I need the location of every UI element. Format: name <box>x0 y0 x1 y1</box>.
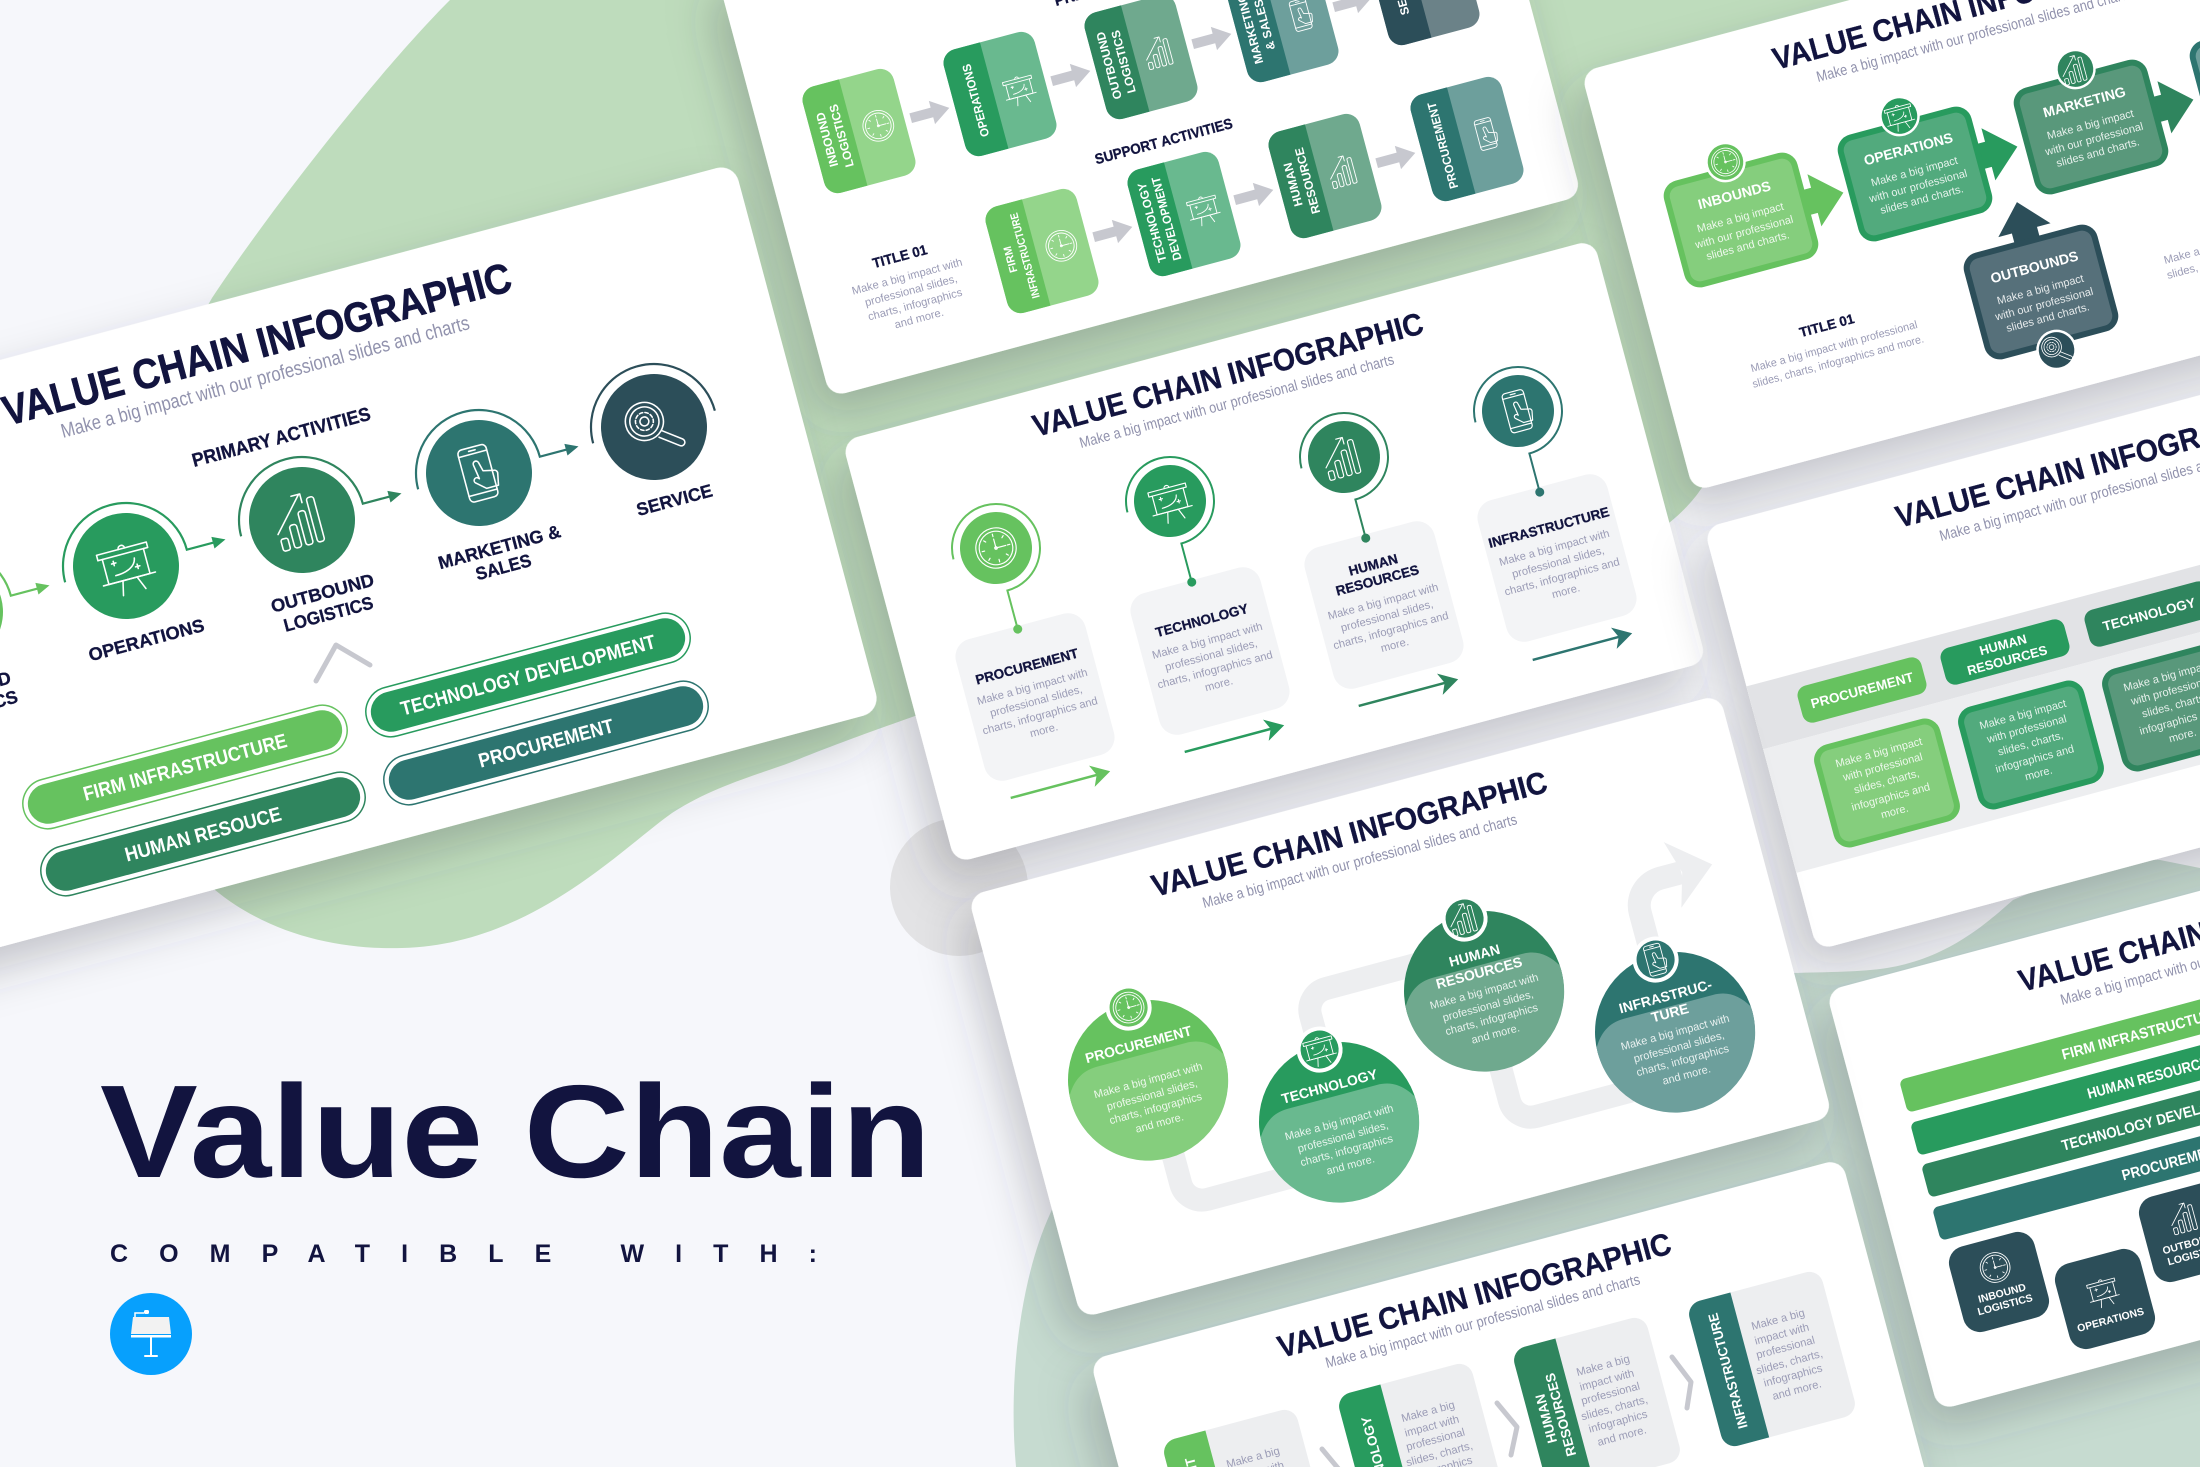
bubble: human resources: RESOURCES <box>1434 953 1524 992</box>
column: human resources: infographics <box>1587 1408 1649 1436</box>
bubble: infrastructure <box>1573 919 1773 1131</box>
background blob: sage <box>1014 860 2200 1467</box>
tab: human resources: HUMAN <box>1978 631 2028 658</box>
tile: technology development <box>1124 149 1244 279</box>
bar: firm infrastructure <box>1899 925 2200 1113</box>
step: human resources: more. <box>1380 636 1410 655</box>
connector path with arrow <box>1128 831 1763 1210</box>
column: infrastructure: and more. <box>1771 1378 1823 1403</box>
column: technology: impact with <box>1403 1414 1461 1440</box>
column: technology: Make a big <box>1400 1399 1456 1425</box>
step: infrastructure: Make a big impact with <box>1498 528 1611 569</box>
text block: title 01: TITLE 01 <box>871 241 929 271</box>
step: infrastructure: more. <box>1551 582 1581 601</box>
tile: operations: OPERATIONS <box>2076 1306 2145 1335</box>
box: outbounds: OUTBOUNDS <box>1989 247 2080 286</box>
tile: firm infrastructure <box>982 186 1102 316</box>
box: next step, cropped <box>2190 13 2200 147</box>
bubble: human resources: and more. <box>1470 1022 1521 1047</box>
box: technology text: more. <box>2168 727 2198 745</box>
box: procurement text <box>1814 719 1960 847</box>
card background <box>968 695 1833 1318</box>
tile: firm infrastructure: INFRASTRUCTURE <box>1008 211 1043 299</box>
compatible with label: COMPATIBLE WITH: <box>110 1240 817 1268</box>
tab: technology: TECHNOLOGY <box>2101 595 2197 634</box>
bubble: infrastructure: and more. <box>1661 1063 1712 1088</box>
title: VALUE CHAIN INFOGRAPHIC <box>1029 306 1427 444</box>
step: technology: charts, infographics and <box>1156 649 1274 691</box>
title: VALUE CHAIN INFOGRAPHIC <box>1148 764 1551 904</box>
step: technology <box>1116 447 1294 763</box>
tile: outbound logistics: LOGISTICS <box>1108 29 1139 95</box>
tile: operations: OPERATIONS <box>959 62 992 139</box>
step: infrastructure: charts, infographics and <box>1503 556 1621 598</box>
column: human resources: Make a big <box>1575 1353 1631 1379</box>
column: infrastructure: Make a big <box>1750 1307 1806 1333</box>
box: operations: with our professional <box>1867 168 1969 206</box>
step: technology: professional slides, <box>1164 638 1259 674</box>
bubble: technology <box>1237 1009 1437 1221</box>
card background <box>0 163 881 978</box>
band: contents <box>1763 548 2200 873</box>
tile: procurement <box>1407 74 1527 204</box>
bubble: infrastructure: Make a big impact with <box>1620 1013 1731 1053</box>
tile: technology development: DEVELOPMENT <box>1149 175 1185 262</box>
title: VALUE CHAIN INFOGRAPHIC <box>1274 1226 1675 1365</box>
card background <box>1581 0 2200 491</box>
column: human resources: HUMAN <box>1533 1392 1560 1445</box>
box: outbounds: slides and charts. <box>2005 301 2091 335</box>
box: procurement text: with professional <box>1841 751 1924 784</box>
column: human resources: professional <box>1580 1380 1641 1408</box>
tile: inbound logistics: LOGISTICS <box>1976 1292 2034 1318</box>
slide: tabbed columns <box>1704 327 2200 950</box>
step: procurement: charts, infographics and <box>981 695 1099 737</box>
step: inbound logistics <box>0 524 63 679</box>
tile: firm infrastructure: FIRM <box>1002 245 1020 274</box>
column: infrastructure: infographics <box>1762 1362 1824 1390</box>
slide: vertical tabs with chevrons <box>1090 1159 1954 1467</box>
box: procurement text: infographics and <box>1850 781 1931 814</box>
box: procurement text: Make a big impact <box>1834 736 1924 770</box>
arrow <box>1374 141 1418 175</box>
label: marketing and sales: SALES <box>473 550 534 584</box>
bubble: infrastructure: charts, infographics <box>1635 1043 1731 1079</box>
bubble: procurement: professional slides, <box>1105 1078 1199 1113</box>
column: human resources: impact with <box>1578 1368 1636 1394</box>
bubble: procurement: charts, infographics <box>1108 1091 1204 1127</box>
arrow <box>1331 0 1375 19</box>
label: marketing and sales: MARKETING & <box>436 521 563 573</box>
text block: title 01: Make a big impact with <box>851 257 964 298</box>
box: outbounds: with our professional <box>1993 286 2095 324</box>
tile: outbound logistics <box>1081 0 1201 122</box>
column: infrastructure: INFRASTRUCTURE <box>1705 1311 1751 1430</box>
step: infrastructure: INFRASTRUCTURE <box>1487 504 1611 551</box>
card background <box>1090 1159 1954 1467</box>
bar: procurement <box>1932 1053 2200 1241</box>
pill: procurement <box>378 676 714 810</box>
arrow <box>1232 178 1276 212</box>
label: operations: OPERATIONS <box>86 615 207 665</box>
tile: inbound logistics: LOGISTICS <box>826 103 857 169</box>
tile: inbound logistics <box>799 66 919 196</box>
label: service: SERVICE <box>634 480 715 520</box>
tile: outbound logistics <box>2135 1178 2200 1286</box>
bubble: technology: charts, infographics <box>1299 1133 1395 1169</box>
tile: inbound logistics <box>1945 1228 2053 1336</box>
step: human resources: HUMAN <box>1347 551 1399 579</box>
tile: marketing and sales <box>1222 0 1342 85</box>
box: inbounds <box>1657 116 1857 287</box>
box: inbounds: INBOUNDS <box>1696 177 1772 212</box>
text block: title 01: TITLE 01 <box>1798 311 1856 340</box>
step: human resources <box>1290 403 1468 717</box>
text block: title 01: Make a big impact with professional <box>1750 319 1919 375</box>
step: outbound logistics <box>225 432 415 587</box>
box: operations: slides and charts. <box>1879 183 1965 217</box>
step: infrastructure: professional slides, <box>1511 545 1606 581</box>
column: technology <box>1336 1361 1508 1467</box>
box: marketing: with our professional <box>2043 121 2145 159</box>
slide: primary activities with support pills <box>0 163 881 978</box>
box: operations: Make a big impact <box>1870 155 1959 189</box>
tile: inbound logistics: INBOUND <box>1977 1281 2028 1306</box>
tile: operations <box>2051 1245 2159 1353</box>
bubble: human resources <box>1382 878 1582 1090</box>
bubble: infrastructure: INFRASTRUC- <box>1617 976 1714 1016</box>
tab: human resources: RESOURCES <box>1965 642 2049 678</box>
arrow <box>1190 22 1234 56</box>
box: human resources text: with professional <box>1985 713 2068 746</box>
tab: procurement <box>1795 655 1929 725</box>
tab: technology <box>2082 579 2200 649</box>
tile: human resource <box>1265 111 1385 241</box>
card background <box>717 0 1582 397</box>
step: service <box>577 350 729 494</box>
subtitle: Make a big impact with our professional slides and charts <box>1078 351 1396 452</box>
box: human resources text: infographics and <box>1994 743 2075 776</box>
step: procurement <box>942 494 1119 809</box>
subtitle: Make a big impact with our professional slides and charts <box>59 312 472 443</box>
band: tabs <box>1746 485 2200 749</box>
tile: outbound logistics: OUTBOUND <box>1093 30 1125 101</box>
step: operations <box>49 478 239 633</box>
bubble: technology: professional slides, <box>1296 1120 1390 1155</box>
pill: technology development <box>360 608 696 742</box>
label: outbound logistics: LOGISTICS <box>281 593 375 636</box>
column: infrastructure: slides, charts, <box>1755 1348 1824 1377</box>
slide: bubbles on a path <box>968 695 1833 1318</box>
arrow <box>1091 215 1135 249</box>
step: procurement: PROCUREMENT <box>974 645 1081 688</box>
tab: procurement: PROCUREMENT <box>1809 669 1916 711</box>
column: technology: professional <box>1405 1426 1466 1454</box>
pill: human resouce <box>35 767 371 901</box>
arrow <box>1049 59 1093 93</box>
box: outbounds: Make a big impact <box>1996 273 2085 307</box>
step: procurement: Make a big impact with <box>976 667 1089 708</box>
bar: human resource <box>1910 968 2200 1156</box>
bubble: human resources: Make a big impact with <box>1429 972 1540 1012</box>
slide: split tiles <box>717 0 1582 397</box>
text block: title 01 <box>851 241 964 331</box>
tile: service <box>1363 0 1483 48</box>
box: inbounds: slides and charts. <box>1705 229 1791 263</box>
bubble: human resources: professional slides, <box>1441 989 1535 1024</box>
bubble: technology: Make a big impact with <box>1284 1103 1395 1143</box>
text block: title 01: charts, infographics <box>867 287 964 323</box>
icon: keynote <box>110 1293 192 1375</box>
bubble: technology: TECHNOLOGY <box>1280 1066 1380 1107</box>
step: infrastructure <box>1464 357 1641 671</box>
chevron <box>1497 1403 1517 1455</box>
bubble: human resources: HUMAN <box>1447 941 1502 970</box>
heading: primary activities: PRIMARY ACTIVITIES <box>190 404 373 472</box>
heading: support activities: SUPPORT ACTIVITIES <box>1093 116 1235 168</box>
tile: procurement: PROCUREMENT <box>1424 100 1461 190</box>
label: outbound logistics <box>269 570 376 636</box>
box: inbounds: Make a big impact <box>1696 201 1785 235</box>
box: human resources text <box>1958 681 2104 809</box>
step: procurement: professional slides, <box>989 684 1084 720</box>
bubble: technology: and more. <box>1325 1153 1376 1178</box>
box: procurement text: more. <box>1880 803 1910 821</box>
tab: human resources <box>1938 617 2072 687</box>
chevron <box>1322 1449 1342 1467</box>
box: marketing <box>2007 23 2200 194</box>
tile: inbound logistics: INBOUND <box>813 110 841 168</box>
pill: technology development: TECHNOLOGY DEVELOPMENT <box>398 631 658 721</box>
bubble: infrastructure: professional slides, <box>1632 1030 1726 1065</box>
step: human resources: RESOURCES <box>1334 562 1421 599</box>
subtitle: Make a big impact with our professional slides and charts <box>1324 1271 1642 1372</box>
chevron <box>316 645 370 681</box>
box: human resources text: more. <box>2024 765 2054 783</box>
step: technology: TECHNOLOGY <box>1154 601 1250 640</box>
pill: firm infrastructure: FIRM INFRASTRUCTURE <box>81 730 290 806</box>
pill: firm infrastructure <box>17 700 353 834</box>
box: inbounds: with our professional <box>1693 214 1795 252</box>
step: human resources: professional slides, <box>1340 598 1435 635</box>
box: human resources text: Make a big impact <box>1978 698 2068 732</box>
box: outbounds <box>1953 185 2125 385</box>
step: human resources: Make a big impact with <box>1327 582 1440 623</box>
column: infrastructure: impact with <box>1753 1322 1811 1348</box>
arrow <box>908 96 952 130</box>
slide: bordered boxes with arrows <box>1581 0 2200 491</box>
background blob: green <box>115 0 1900 948</box>
tile: human resource: HUMAN <box>1281 161 1306 208</box>
main title: Value Chain <box>100 1058 931 1205</box>
column: infrastructure: professional <box>1755 1334 1816 1362</box>
tile: operations <box>940 29 1060 159</box>
text block: title 01: slides, charts, infographics and more. <box>1751 333 1925 391</box>
pill: human resouce: HUMAN RESOUCE <box>123 804 284 866</box>
box: marketing: slides and charts. <box>2055 136 2141 170</box>
step: technology: Make a big impact with <box>1151 621 1264 662</box>
step: procurement: more. <box>1029 721 1059 740</box>
step: technology: more. <box>1204 675 1234 694</box>
box: marketing: MARKETING <box>2041 83 2127 121</box>
slide: pinned circles and note cards <box>842 240 1707 863</box>
box: procurement text: slides, charts, <box>1853 768 1921 797</box>
chevron <box>1672 1357 1691 1408</box>
box: operations: OPERATIONS <box>1862 129 1955 168</box>
step: human resources: charts, infographics and <box>1332 610 1450 652</box>
bubble: procurement: PROCUREMENT <box>1083 1022 1194 1066</box>
bubble: procurement: and more. <box>1134 1111 1185 1136</box>
card background <box>1826 790 2200 1410</box>
box: technology text <box>2102 643 2200 771</box>
column: infrastructure <box>1686 1269 1858 1449</box>
bar: technology development <box>1921 1010 2200 1198</box>
column: human resources: and more. <box>1596 1424 1648 1449</box>
column: human resources <box>1511 1315 1683 1467</box>
subtitle: Make a big impact with our professional slides and charts <box>1201 811 1519 912</box>
box: marketing: Make a big impact <box>2046 108 2135 142</box>
bubble: infrastructure: TURE <box>1649 1000 1690 1025</box>
box: operations <box>1831 70 2031 241</box>
tile: technology development: TECHNOLOGY <box>1135 181 1169 264</box>
card background <box>1704 327 2200 950</box>
title: VALUE CHAIN INFOGRAPHIC <box>0 253 516 435</box>
column: procurement <box>1161 1407 1333 1467</box>
step: marketing and sales <box>402 385 592 540</box>
column: human resources: slides, charts, <box>1580 1394 1649 1423</box>
slide: stacked bars and tiles <box>1826 790 2200 1410</box>
pill: procurement: PROCUREMENT <box>476 715 616 773</box>
label: outbound logistics: OUTBOUND <box>269 570 376 617</box>
background circle: grey <box>890 818 1028 956</box>
bubble: procurement: Make a big impact with <box>1093 1061 1204 1101</box>
bubble: procurement <box>1046 967 1246 1179</box>
bubble: human resources: charts, infographics <box>1444 1002 1540 1038</box>
column: human resources: RESOURCES <box>1542 1371 1579 1458</box>
text block: title 01: and more. <box>893 307 945 331</box>
card background <box>842 240 1707 863</box>
box: human resources text: slides, charts, <box>1997 730 2065 759</box>
tile: human resource: RESOURCE <box>1292 146 1323 215</box>
text block: title 01: professional slides, <box>864 273 959 309</box>
